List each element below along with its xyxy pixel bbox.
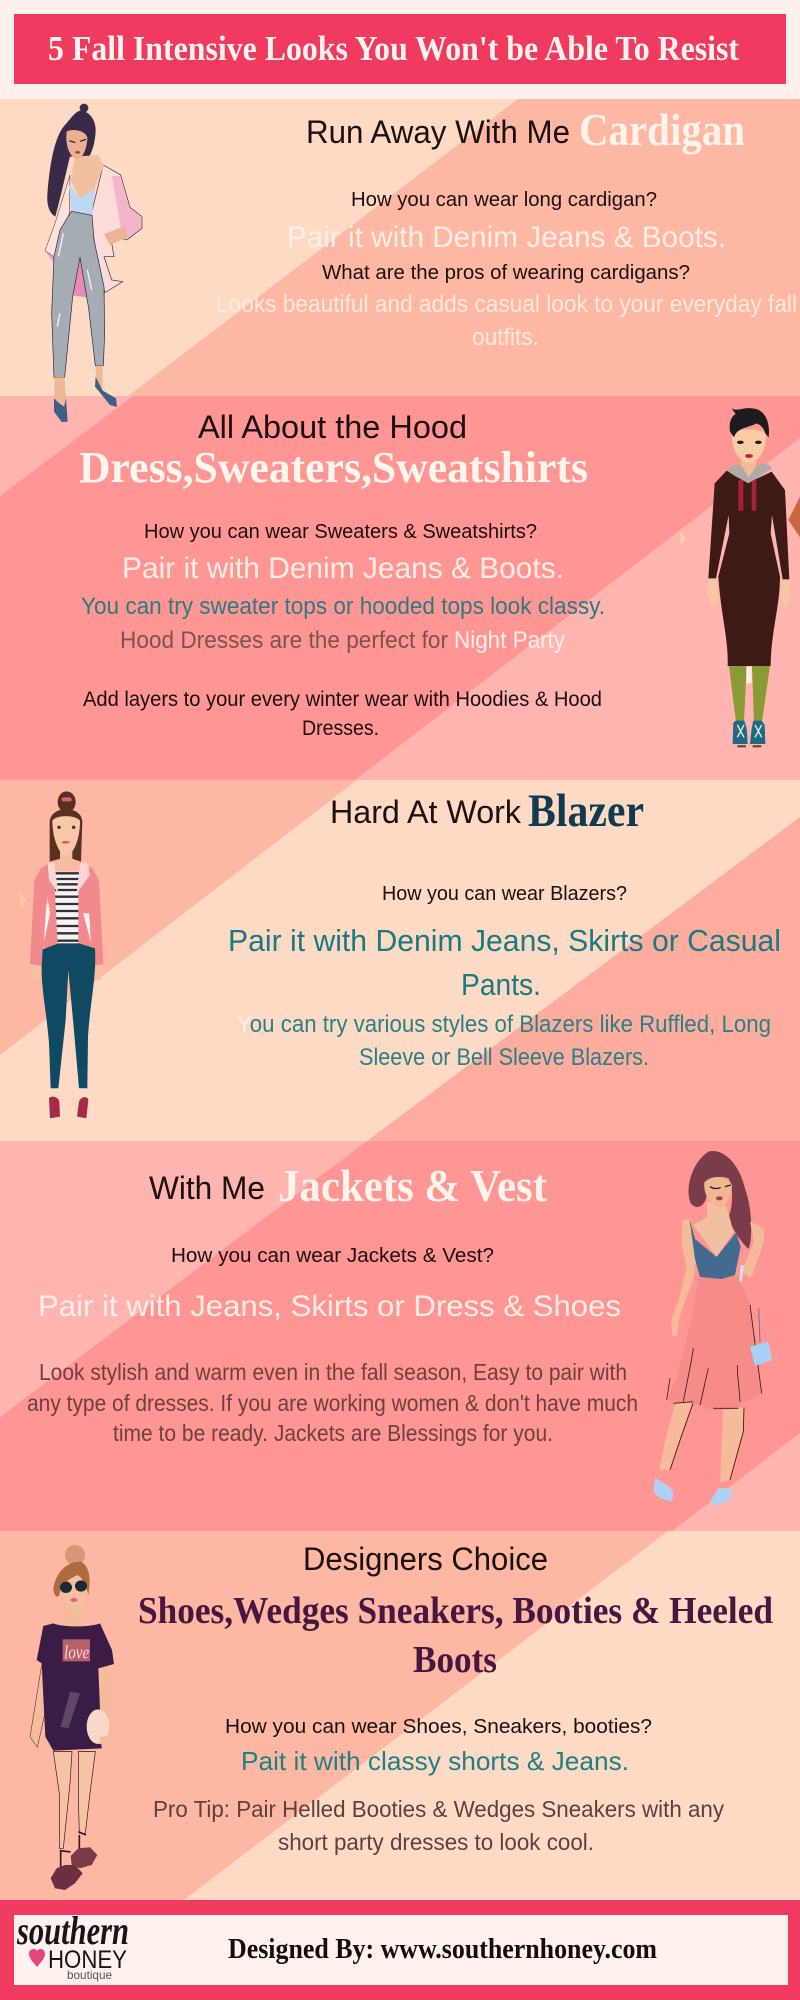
illustration: woman in hooded dress — [680, 408, 800, 747]
text block: jacket advice — [27, 1245, 638, 1446]
heading: Shoes, Wedges Sneakers, Booties & Heeled Boots: Boots — [413, 1639, 497, 1681]
text block: hood advice: Pair it with Denim Jeans & Boots. — [122, 552, 564, 585]
text block: cardigan advice: How you can wear long cardigan? — [351, 189, 657, 211]
heading: Dress, Sweaters, Sweatshirts: Dress,Sweaters,Sweatshirts — [79, 443, 588, 492]
text block: jacket advice: time to be ready. Jackets are Blessings for you. — [113, 1420, 553, 1446]
panel: shoes — [0, 1531, 800, 1900]
heading: All About the Hood: All About the Hood — [198, 409, 467, 445]
text block: jacket advice: Pair it with Jeans, Skirts or Dress & Shoes — [38, 1290, 621, 1323]
illustration: woman in pink cardigan — [45, 104, 142, 422]
text block: blazer advice: Pair it with Denim Jeans, Skirts or Casual — [228, 923, 781, 958]
text block: blazer advice: How you can wear Blazers? — [382, 883, 627, 905]
illustration: woman in skirt with blue bag — [653, 1151, 772, 1506]
heading: Designers Choice: Designers Choice — [303, 1541, 548, 1577]
text block: hood advice: Night Party — [454, 627, 565, 654]
logo: Southern Honey boutique — [16, 1908, 129, 1982]
text block: cardigan advice: outfits. — [472, 324, 539, 351]
panel: blazer — [0, 780, 800, 1141]
text block: blazer advice — [228, 883, 781, 1071]
heading: Hard At Work Blazer: Blazer — [528, 785, 644, 837]
heading: With Me Jackets & Vest — [149, 1161, 547, 1211]
heading: Run Away With Me Cardigan — [306, 104, 745, 155]
text block: blazer advice: Sleeve or Bell Sleeve Blazers. — [359, 1044, 649, 1071]
logo: Southern Honey boutique: boutique — [67, 1968, 112, 1982]
title: 5 Fall Intensive Looks You Won't be Able To Resist — [48, 29, 739, 68]
text block: shoes advice: Pro Tip: Pair Helled Booties & Wedges Sneakers with any — [153, 1796, 724, 1822]
text block: shoes advice: Pait it with classy shorts & Jeans. — [241, 1746, 629, 1776]
text block: blazer advice: You can try various styles of Blazers like Ruffled, Long — [237, 1011, 771, 1038]
text block: cardigan advice: What are the pros of wearing cardigans? — [322, 262, 690, 284]
text block: shoes advice: short party dresses to look cool. — [278, 1829, 594, 1855]
heading: Hard At Work Blazer: Hard At Work — [330, 794, 522, 830]
logo: Southern Honey boutique: southern — [16, 1908, 129, 1953]
panel: hood — [0, 396, 800, 780]
text block: cardigan advice: Pair it with Denim Jeans & Boots. — [287, 221, 726, 254]
text block: hood advice: Add layers to your every winter wear with Hoodies & Hood — [83, 688, 602, 711]
text block: hood advice: Hood Dresses are the perfect for — [120, 627, 448, 654]
heading: Run Away With Me Cardigan: Cardigan — [579, 104, 745, 155]
text block: jacket advice: How you can wear Jackets & Vest? — [171, 1245, 494, 1267]
text block: shoes advice: How you can wear Shoes, Sneakers, booties? — [225, 1716, 652, 1738]
panel: jackets and vest — [0, 1141, 800, 1531]
footer — [0, 1900, 800, 2000]
panel: cardigan — [0, 99, 800, 396]
text block: jacket advice: Look stylish and warm even in the fall season, Easy to pair with — [39, 1359, 627, 1385]
heading: Run Away With Me Cardigan: Run Away With Me — [306, 114, 570, 150]
text block: hood advice — [81, 521, 605, 740]
heading: With Me Jackets & Vest: Jackets & Vest — [278, 1161, 547, 1211]
text block: hood advice: You can try sweater tops or hooded tops look classy. — [81, 593, 605, 620]
credit text: Designed By: www.southernhoney.com — [228, 1934, 657, 1965]
illustration: woman in love t-shirt dress — [30, 1545, 114, 1890]
heading: Shoes, Wedges Sneakers, Booties & Heeled Boots — [138, 1590, 773, 1681]
text block: hood advice: Dresses. — [302, 717, 379, 740]
text block: blazer advice: Pants. — [461, 967, 541, 1002]
illustration: woman in pink blazer — [20, 791, 103, 1118]
logo: Southern Honey boutique: HONEY — [48, 1946, 127, 1974]
heading: Hard At Work Blazer — [330, 785, 644, 837]
heading: With Me Jackets & Vest: With Me — [149, 1170, 265, 1206]
text block: jacket advice: any type of dresses. If you are working women & don't have much — [27, 1390, 638, 1416]
text block: shoes advice — [153, 1716, 724, 1855]
text block: hood advice: How you can wear Sweaters & Sweatshirts? — [144, 521, 537, 543]
title banner — [14, 14, 786, 84]
text block: cardigan advice — [216, 189, 797, 351]
illustration: woman in love t-shirt dress: love — [64, 1643, 90, 1664]
